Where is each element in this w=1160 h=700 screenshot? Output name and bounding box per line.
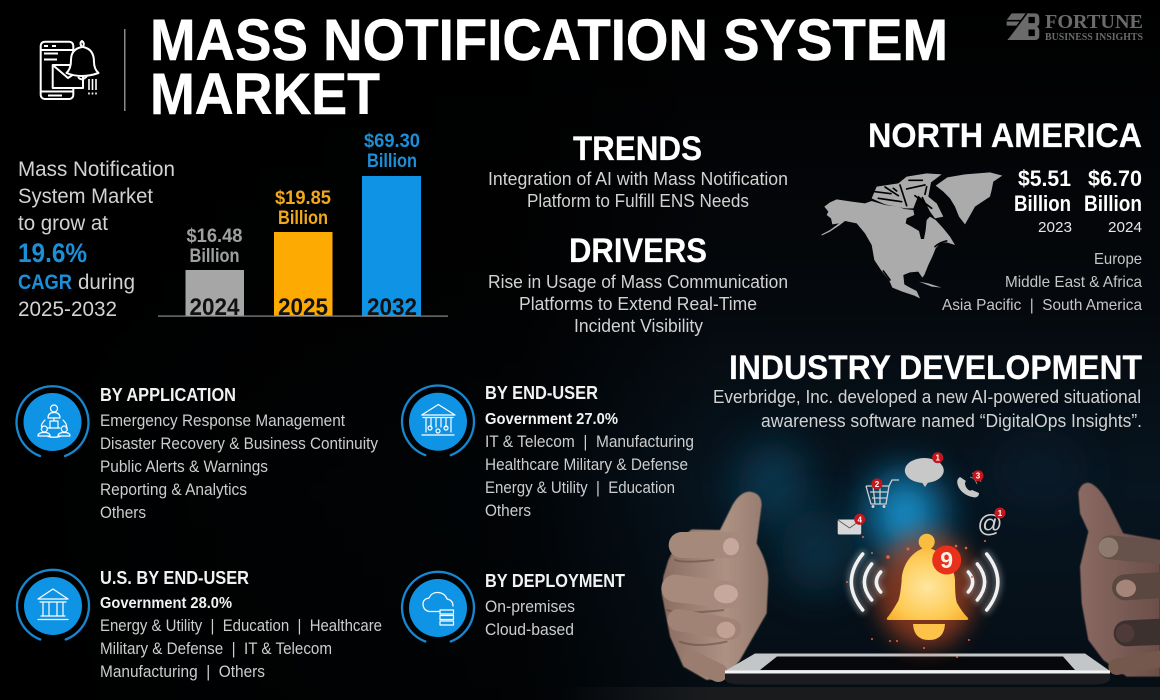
title icon: phone, bell and envelope (41, 41, 98, 99)
by deployment text (485, 571, 625, 639)
drivers: DRIVERS (569, 232, 707, 270)
by application text (100, 385, 378, 522)
industry development: Everbridge, Inc. developed a new AI-powered situational (713, 387, 1141, 407)
north america heading: NORTH AMERICA (868, 117, 1142, 155)
bar chart: $16.48 (186, 226, 242, 247)
icon: at sign: @ (977, 510, 1003, 538)
badge: 9 (932, 546, 961, 574)
north america values: Billion (1014, 191, 1071, 216)
by end-user text: Others (485, 501, 531, 520)
other regions: Asia Pacific | South America (942, 297, 1142, 314)
icon: envelope: 4 (857, 515, 862, 524)
icon: chat bubble (905, 452, 944, 487)
drivers: Platforms to Extend Real-Time (519, 294, 757, 314)
drivers: Incident Visibility (574, 316, 703, 336)
trends: Platform to Fulfill ENS Needs (527, 191, 749, 211)
title (150, 8, 948, 127)
north america values: $6.70 (1088, 166, 1142, 191)
sparks (846, 536, 986, 658)
icon: u.s. by end-user (17, 570, 89, 640)
glowing bell (876, 532, 976, 648)
by end-user text: IT & Telecom | Manufacturing (485, 432, 694, 451)
other regions: Middle East & Africa (1005, 274, 1142, 291)
drivers (488, 232, 788, 336)
industry development (713, 349, 1142, 431)
growth statement: to grow at (18, 212, 108, 235)
u.s. by end-user text: Energy & Utility | Education | Healthcare (100, 616, 382, 635)
bar chart: $19.85 (275, 188, 331, 209)
industry development: INDUSTRY DEVELOPMENT (729, 349, 1142, 387)
north america values: 2023 (1038, 219, 1072, 236)
by application text: Reporting & Analytics (100, 480, 247, 499)
by end-user text (485, 383, 694, 520)
by application text: Others (100, 503, 146, 522)
icon: shopping cart: 2 (875, 480, 880, 489)
logo: Fortune Business Insights (1007, 11, 1143, 43)
trends: TRENDS (573, 130, 702, 168)
bar chart: 2032 (367, 294, 417, 321)
north america values (1014, 166, 1142, 236)
by application text: BY APPLICATION (100, 385, 236, 405)
growth statement: CAGR (18, 271, 72, 294)
icon: chat bubble: 1 (935, 454, 940, 463)
by end-user text: BY END-USER (485, 383, 598, 403)
growth statement: during (78, 271, 135, 294)
growth statement: 2025-2032 (18, 298, 117, 321)
north america values: Billion (1084, 191, 1142, 216)
u.s. by end-user text: Manufacturing | Others (100, 662, 265, 681)
trends: Integration of AI with Mass Notification (488, 169, 788, 189)
by application text: Disaster Recovery & Business Continuity (100, 434, 378, 453)
logo: Fortune Business Insights: FORTUNE (1045, 11, 1143, 33)
bar chart: 2025 (278, 294, 328, 321)
bar chart: Billion (190, 246, 240, 267)
growth statement: System Market (18, 185, 153, 208)
other regions: Europe (1094, 251, 1142, 268)
icon: at sign: 1 (998, 509, 1003, 518)
north america values: $5.51 (1018, 166, 1071, 191)
icon: shopping cart (866, 478, 899, 508)
by deployment text: BY DEPLOYMENT (485, 571, 625, 591)
icon: envelope (838, 514, 865, 534)
u.s. by end-user text: Military & Defense | IT & Telecom (100, 639, 332, 658)
drivers: Rise in Usage of Mass Communication (488, 272, 788, 292)
logo: Fortune Business Insights: BUSINESS INSIGHTS (1045, 32, 1143, 43)
icon: by application (16, 386, 89, 456)
growth statement: Mass Notification (18, 158, 175, 181)
growth statement: 19.6% (18, 238, 87, 268)
title: MASS NOTIFICATION SYSTEM (150, 8, 948, 73)
bar chart: Billion (367, 151, 417, 172)
u.s. by end-user text: Government 28.0% (100, 595, 232, 612)
u.s. by end-user text (100, 568, 382, 681)
growth statement (18, 158, 175, 321)
left hand (662, 492, 768, 680)
u.s. by end-user text: U.S. BY END-USER (100, 568, 249, 588)
icon: by deployment (402, 572, 474, 642)
bar chart: 2024 (190, 294, 240, 321)
by end-user text: Healthcare Military & Defense (485, 455, 688, 474)
by end-user text: Government 27.0% (485, 411, 618, 428)
bar chart: $69.30 (364, 131, 420, 152)
tablet (725, 654, 1110, 684)
by deployment text: On-premises (485, 597, 575, 616)
map: North America (822, 172, 1002, 298)
icon: phone (957, 470, 984, 498)
bar chart (158, 131, 448, 321)
by application text: Public Alerts & Warnings (100, 457, 268, 476)
right hand (1078, 483, 1160, 677)
north america values: 2024 (1108, 219, 1142, 236)
title: MARKET (150, 62, 380, 127)
by application text: Emergency Response Management (100, 411, 345, 430)
bar chart: Billion (278, 208, 328, 229)
industry development: awareness software named “DigitalOps Insights”. (761, 411, 1142, 431)
trends (488, 130, 788, 211)
by end-user text: Energy & Utility | Education (485, 478, 675, 497)
other regions (942, 251, 1142, 314)
sound waves (851, 554, 998, 610)
by deployment text: Cloud-based (485, 620, 574, 639)
icon: by end-user (402, 386, 474, 455)
badge: 9: 9 (940, 547, 953, 573)
icon: phone: 3 (976, 472, 981, 481)
